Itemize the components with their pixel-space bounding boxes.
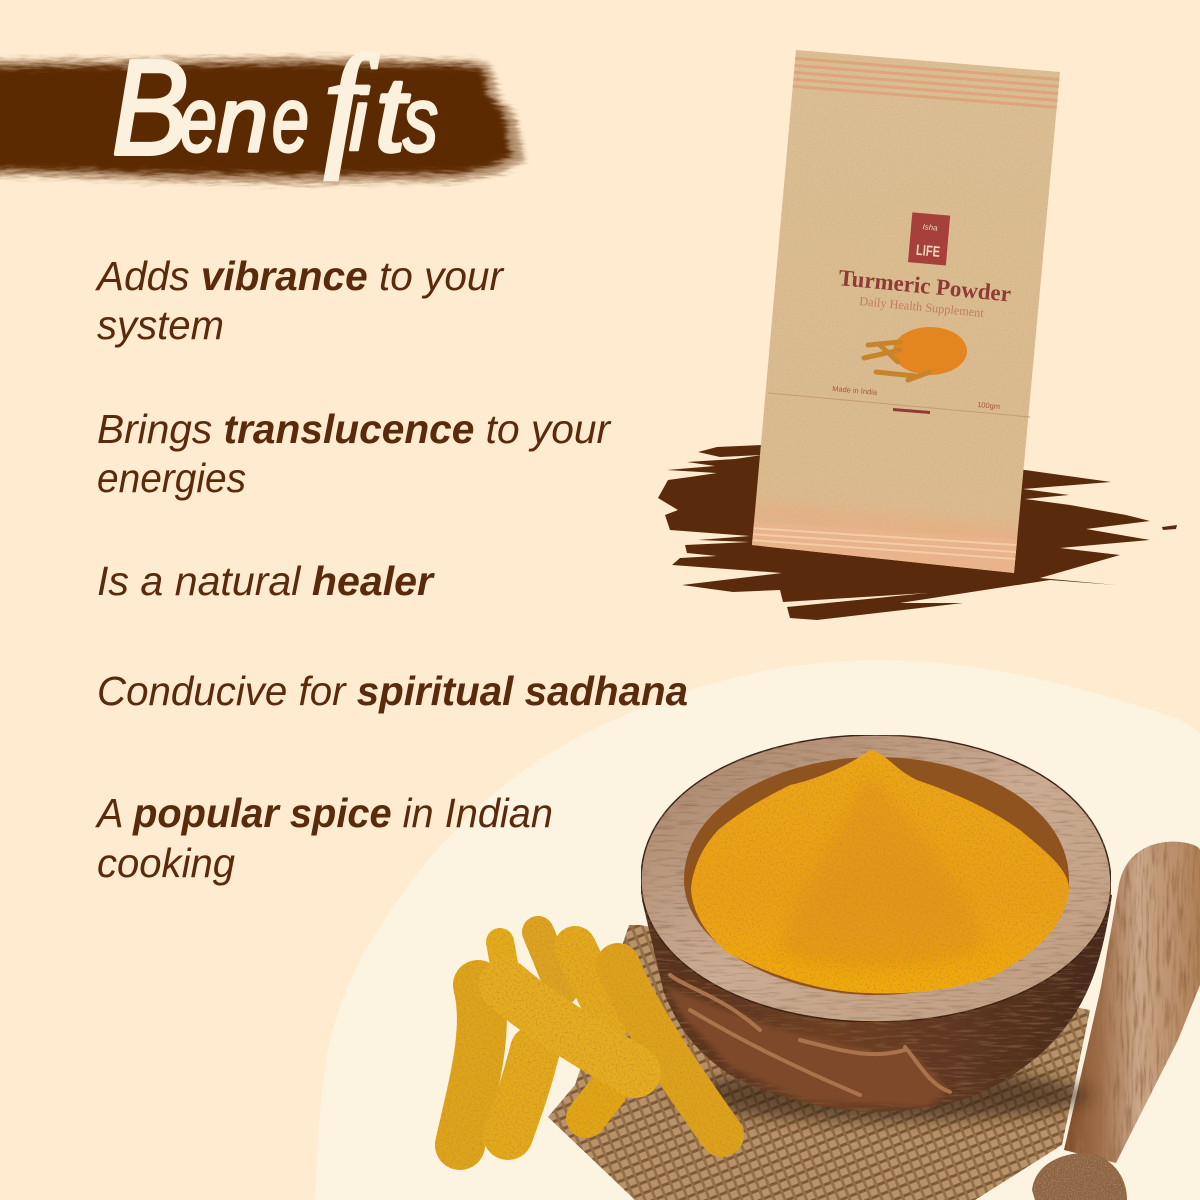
bowl rim — [641, 735, 1111, 1022]
background circle — [315, 660, 1200, 1200]
front root — [505, 985, 635, 1072]
back root two — [575, 947, 610, 1020]
splash fleck — [1162, 525, 1177, 530]
bowl inner — [684, 757, 1069, 995]
powder mound — [691, 750, 1069, 993]
turmeric roots — [460, 932, 722, 1145]
label bar — [893, 408, 930, 414]
title — [112, 27, 438, 183]
benefit 5 — [94, 790, 553, 886]
short root — [586, 1090, 608, 1118]
weight: 100gm — [977, 400, 1000, 411]
brush stroke — [0, 64, 512, 175]
pouch — [752, 50, 1060, 573]
bowl shadow — [670, 1069, 1090, 1121]
label rule — [768, 393, 1030, 417]
benefit 1: system — [97, 302, 224, 348]
benefit 4: Conducive for spiritual sadhana — [97, 668, 688, 714]
benefit 1 — [94, 253, 505, 348]
middle root — [508, 1050, 535, 1135]
title: n — [217, 69, 268, 171]
burlap cloth — [548, 925, 1090, 1200]
back root one — [538, 932, 562, 990]
carved lines — [670, 975, 950, 1095]
left root — [460, 985, 482, 1145]
title: f — [324, 27, 379, 180]
heading banner — [0, 27, 525, 184]
bowl — [641, 735, 1112, 1121]
bowl body — [642, 895, 1112, 1112]
product pack with splash — [658, 50, 1177, 620]
made in india: Made in India — [832, 384, 878, 397]
title: t — [375, 55, 410, 174]
logo: Isha — [922, 222, 939, 233]
tagline: Daily Health Supplement — [859, 294, 985, 320]
benefit 2 — [97, 406, 612, 501]
benefit 2: Brings translucence to your — [97, 406, 612, 452]
title: i — [349, 72, 369, 170]
right root — [618, 965, 722, 1135]
benefit 5: A popular spice in Indian — [94, 790, 553, 836]
brown paint splash — [658, 445, 1150, 620]
logo — [908, 212, 950, 265]
upper stem — [500, 942, 506, 975]
product name: Turmeric Powder — [838, 265, 1012, 307]
title: e — [272, 67, 309, 171]
turmeric still life — [460, 735, 1200, 1200]
benefit 2: energies — [97, 455, 246, 501]
pouch seals — [750, 58, 1065, 575]
benefit 5: cooking — [97, 840, 235, 886]
turmeric illustration — [864, 327, 967, 380]
title: e — [180, 67, 217, 171]
title: B — [112, 32, 189, 183]
logo: LIFE — [915, 242, 941, 261]
powder shade — [780, 775, 985, 968]
brush fringe — [0, 57, 525, 184]
benefit 3: Is a natural healer — [97, 558, 435, 604]
carved pattern — [665, 985, 949, 1107]
pestle — [1032, 842, 1200, 1200]
benefits text — [94, 253, 688, 886]
benefit 1: Adds vibrance to your — [94, 253, 505, 299]
title: s — [403, 69, 438, 171]
